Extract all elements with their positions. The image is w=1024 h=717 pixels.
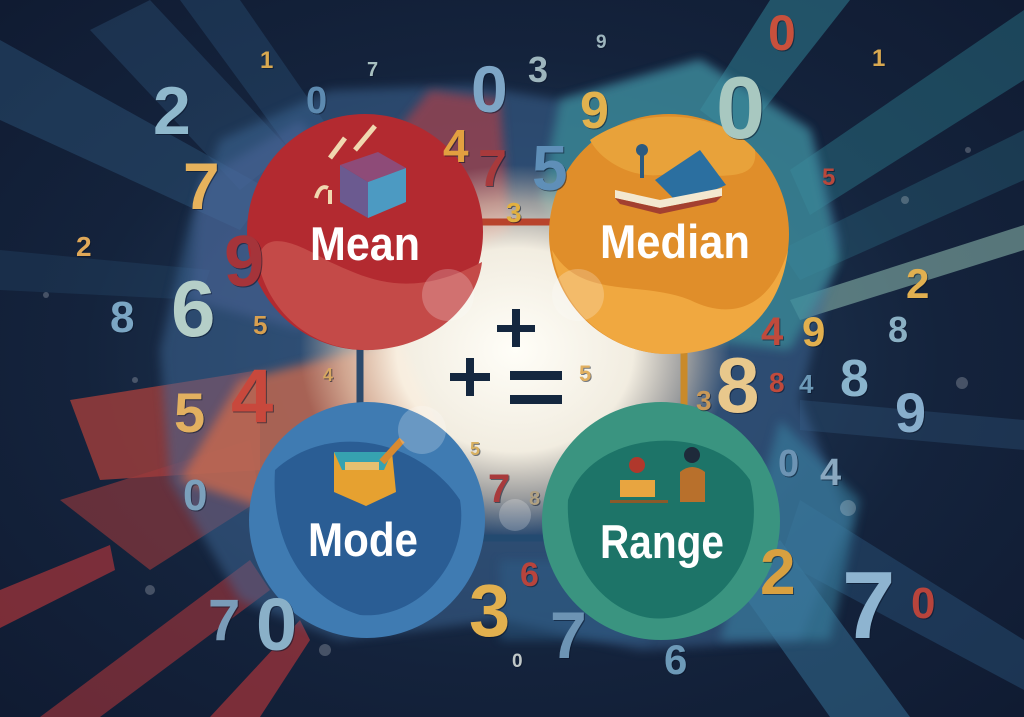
scattered numbers: 5 bbox=[532, 132, 568, 204]
scattered numbers: 8 bbox=[769, 367, 785, 398]
scattered numbers: 5 bbox=[822, 164, 835, 191]
icon: box bbox=[316, 126, 406, 218]
circle: median bbox=[549, 114, 789, 354]
circle: mode bbox=[249, 402, 485, 638]
center symbols bbox=[450, 309, 562, 404]
scattered numbers: 4 bbox=[799, 369, 814, 399]
scattered numbers: 0 bbox=[471, 52, 508, 126]
scattered numbers: 7 bbox=[183, 149, 220, 223]
scattered numbers: 5 bbox=[470, 439, 480, 459]
scattered numbers: 4 bbox=[443, 120, 469, 172]
icon: two people bbox=[610, 447, 705, 503]
scattered numbers: 9 bbox=[802, 308, 825, 355]
label: mode: Mode bbox=[308, 513, 418, 566]
circle: mean bbox=[247, 114, 483, 350]
scattered numbers: 8 bbox=[110, 293, 134, 342]
scattered numbers: 7 bbox=[478, 140, 507, 198]
scattered numbers: 4 bbox=[820, 452, 841, 494]
scattered numbers: 9 bbox=[580, 82, 609, 140]
scattered numbers: 2 bbox=[76, 231, 92, 262]
scattered numbers: 4 bbox=[761, 310, 784, 354]
central burst bbox=[160, 60, 860, 650]
scattered numbers: 0 bbox=[512, 651, 523, 672]
scattered numbers: 5 bbox=[174, 381, 205, 444]
bokeh dots bbox=[43, 147, 971, 656]
scattered numbers: 3 bbox=[506, 197, 522, 228]
scattered numbers bbox=[76, 5, 935, 683]
scattered numbers: 7 bbox=[842, 552, 895, 659]
scattered numbers: 4 bbox=[323, 365, 333, 385]
scattered numbers: 7 bbox=[488, 467, 510, 511]
scattered numbers: 3 bbox=[528, 49, 548, 90]
icon: paint box bbox=[334, 440, 402, 506]
scattered numbers: 0 bbox=[768, 5, 796, 61]
scattered numbers: 8 bbox=[888, 309, 908, 350]
scattered numbers: 9 bbox=[895, 381, 926, 444]
scattered numbers: 4 bbox=[231, 354, 273, 439]
label: median: Median bbox=[600, 215, 750, 268]
scattered numbers: 7 bbox=[550, 598, 587, 672]
label: range: Range bbox=[600, 515, 724, 568]
scattered numbers: 3 bbox=[469, 569, 510, 652]
scattered numbers: 5 bbox=[579, 361, 591, 386]
scattered numbers: 6 bbox=[520, 556, 539, 594]
icon: books bbox=[615, 144, 726, 214]
scattered numbers: 2 bbox=[906, 260, 929, 307]
scattered numbers: 3 bbox=[696, 385, 712, 416]
scattered numbers: 2 bbox=[760, 536, 796, 608]
central glow bbox=[300, 165, 730, 535]
connectors bbox=[360, 222, 684, 538]
scattered numbers: 1 bbox=[260, 47, 273, 74]
scattered numbers: 9 bbox=[224, 222, 264, 302]
scattered numbers: 0 bbox=[183, 471, 207, 520]
scattered numbers: 7 bbox=[367, 59, 378, 81]
scattered numbers: 6 bbox=[171, 264, 216, 353]
scattered numbers: 0 bbox=[911, 579, 935, 628]
scattered numbers: 1 bbox=[872, 45, 885, 72]
scattered numbers: 6 bbox=[664, 636, 687, 683]
scattered numbers: 9 bbox=[596, 32, 607, 53]
scattered numbers: 0 bbox=[778, 443, 799, 485]
scattered numbers: 0 bbox=[306, 80, 327, 122]
label: mean: Mean bbox=[310, 217, 420, 270]
circle: range bbox=[542, 402, 780, 640]
scattered numbers: 8 bbox=[716, 341, 759, 429]
scattered numbers: 5 bbox=[253, 310, 267, 340]
scattered numbers: 7 bbox=[208, 588, 240, 653]
scattered numbers: 2 bbox=[153, 73, 191, 149]
scattered numbers: 8 bbox=[840, 350, 869, 408]
scattered numbers: 0 bbox=[256, 583, 297, 666]
scattered numbers: 8 bbox=[529, 488, 540, 510]
scattered numbers: 0 bbox=[716, 58, 765, 157]
